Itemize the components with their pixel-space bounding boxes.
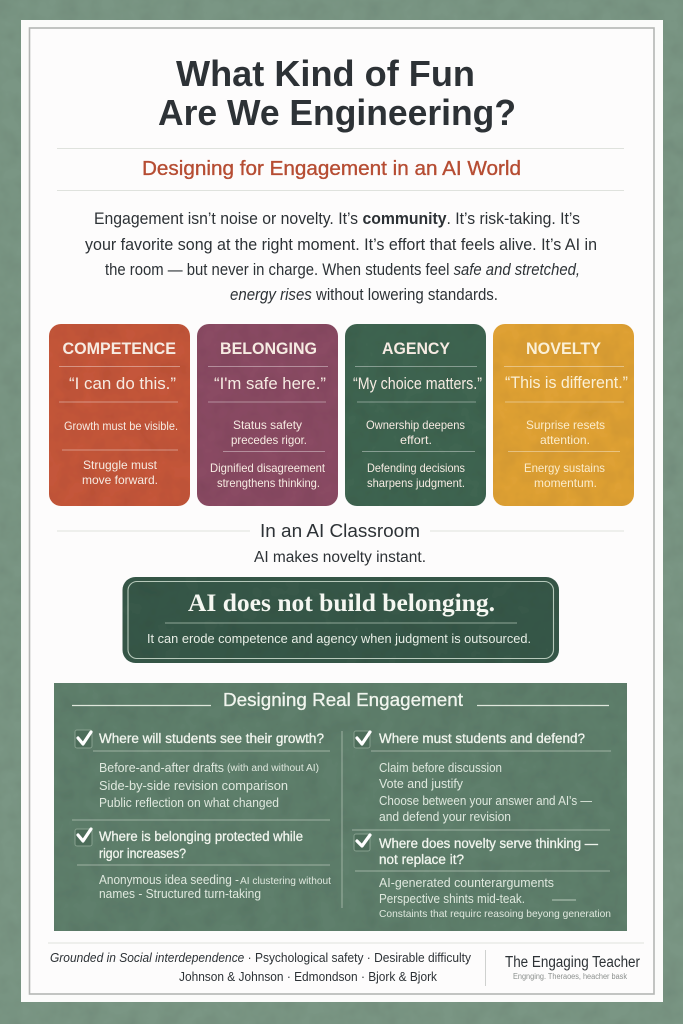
question: belonging: Where is belonging protected while (99, 829, 303, 844)
panel: belonging: “I'm safe here.” (214, 374, 326, 393)
question: belonging: Anonymous idea seeding - (99, 873, 239, 887)
panel: agency: “My choice matters.” (353, 374, 482, 393)
question: novelty: Perspective shints mid-teak. (379, 892, 525, 906)
question: growth (75, 730, 330, 810)
question: defend: and defend your revision (379, 810, 511, 824)
question: belonging (75, 829, 331, 901)
panel: designing real engagement (54, 683, 627, 931)
question: belonging: names - Structured turn-taking (99, 887, 261, 901)
intro paragraph: the room — but never in charge. When students feel safe and stretched, (105, 260, 580, 279)
panel: novelty: momentum. (534, 476, 597, 490)
question: defend: Choose between your answer and AI's — (379, 794, 592, 808)
panel: agency (345, 324, 486, 506)
panel: novelty: Surprise resets (526, 418, 605, 432)
question: novelty: AI-generated counterarguments (379, 875, 554, 890)
subtitle: Designing for Engagement in an AI World (142, 158, 521, 180)
panel: novelty: attention. (540, 433, 590, 447)
panel: belonging: precedes rigor. (231, 433, 307, 447)
panel heading: Designing Real Engagement (223, 689, 463, 710)
footer: brand (486, 950, 640, 986)
question: belonging: AI clustering without (240, 875, 331, 887)
question: growth: Before-and-after drafts (99, 760, 224, 775)
title: Are We Engineering? (158, 92, 516, 133)
footer: brand: Engnging. Theraoes, heacher bask (513, 972, 628, 981)
panel: competence: “I can do this.” (69, 374, 176, 393)
question: belonging: rigor increases? (99, 846, 186, 861)
intro paragraph: energy rises without lowering standards. (230, 285, 498, 304)
title: What Kind of Fun (176, 53, 475, 94)
panel: competence (49, 324, 190, 506)
question: growth: Side-by-side revision comparison (99, 778, 288, 793)
panel: agency: AGENCY (382, 339, 451, 358)
panel: novelty: Energy sustains (524, 461, 605, 475)
section heading: in an AI classroom: In an AI Classroom (260, 521, 420, 541)
title (158, 53, 516, 133)
footer: citations (48, 943, 644, 984)
panel: belonging: strengthens thinking. (217, 476, 320, 490)
question: defend: Vote and justify (379, 776, 463, 791)
question: defend (354, 731, 611, 824)
intro paragraph: Engagement isn’t noise or novelty. It’s community. It’s risk-taking. It’s (94, 209, 580, 228)
callout: AI does not build belonging: It can erode competence and agency when judgment is outsourced. (147, 631, 531, 646)
footer: brand: The Engaging Teacher (505, 954, 640, 971)
question: novelty (354, 834, 611, 920)
panel: agency: sharpens judgment. (367, 476, 465, 490)
callout: AI does not build belonging (122, 577, 559, 663)
footer: citations: Johnson & Johnson · Edmondson · Bjork & Bjork (179, 970, 438, 984)
panel: agency: Ownership deepens (366, 418, 465, 432)
panel: belonging: BELONGING (220, 339, 317, 358)
panel: competence: Growth must be visible. (64, 419, 178, 433)
panel: competence: COMPETENCE (62, 339, 176, 358)
panel: agency: Defending decisions (367, 461, 465, 475)
intro paragraph: your favorite song at the right moment. It’s effort that feels alive. It’s AI in (85, 235, 597, 254)
footer: citations: Grounded in Social interdependence · Psychological safety · Desirable difficulty (50, 951, 472, 965)
panel: competence: Struggle must (83, 458, 158, 472)
question: novelty: Constaints that requirc reasoing beyong generation (379, 908, 611, 920)
panel: agency: effort. (400, 433, 432, 447)
panel: belonging: Status safety (233, 418, 302, 432)
question: novelty: not replace it? (379, 852, 464, 867)
panel: novelty: NOVELTY (526, 339, 602, 358)
intro paragraph (85, 209, 597, 304)
question: defend: Where must students and defend? (379, 731, 585, 746)
panel: competence: move forward. (82, 473, 158, 487)
text: AI makes novelty instant: AI makes novelty instant. (254, 549, 426, 566)
panel: belonging (197, 324, 338, 506)
callout: AI does not build belonging: AI does not build belonging. (188, 590, 495, 617)
question: growth: Where will students see their growth? (99, 731, 324, 746)
question: defend: Claim before discussion (379, 760, 502, 775)
question: novelty: Where does novelty serve thinking — (379, 836, 598, 851)
panel: belonging: Dignified disagreement (210, 461, 326, 475)
question: growth: Public reflection on what changed (99, 795, 279, 810)
panel: novelty: “This is different.” (505, 373, 628, 392)
panel: novelty (493, 324, 634, 506)
question: growth: (with and without AI) (227, 763, 319, 774)
